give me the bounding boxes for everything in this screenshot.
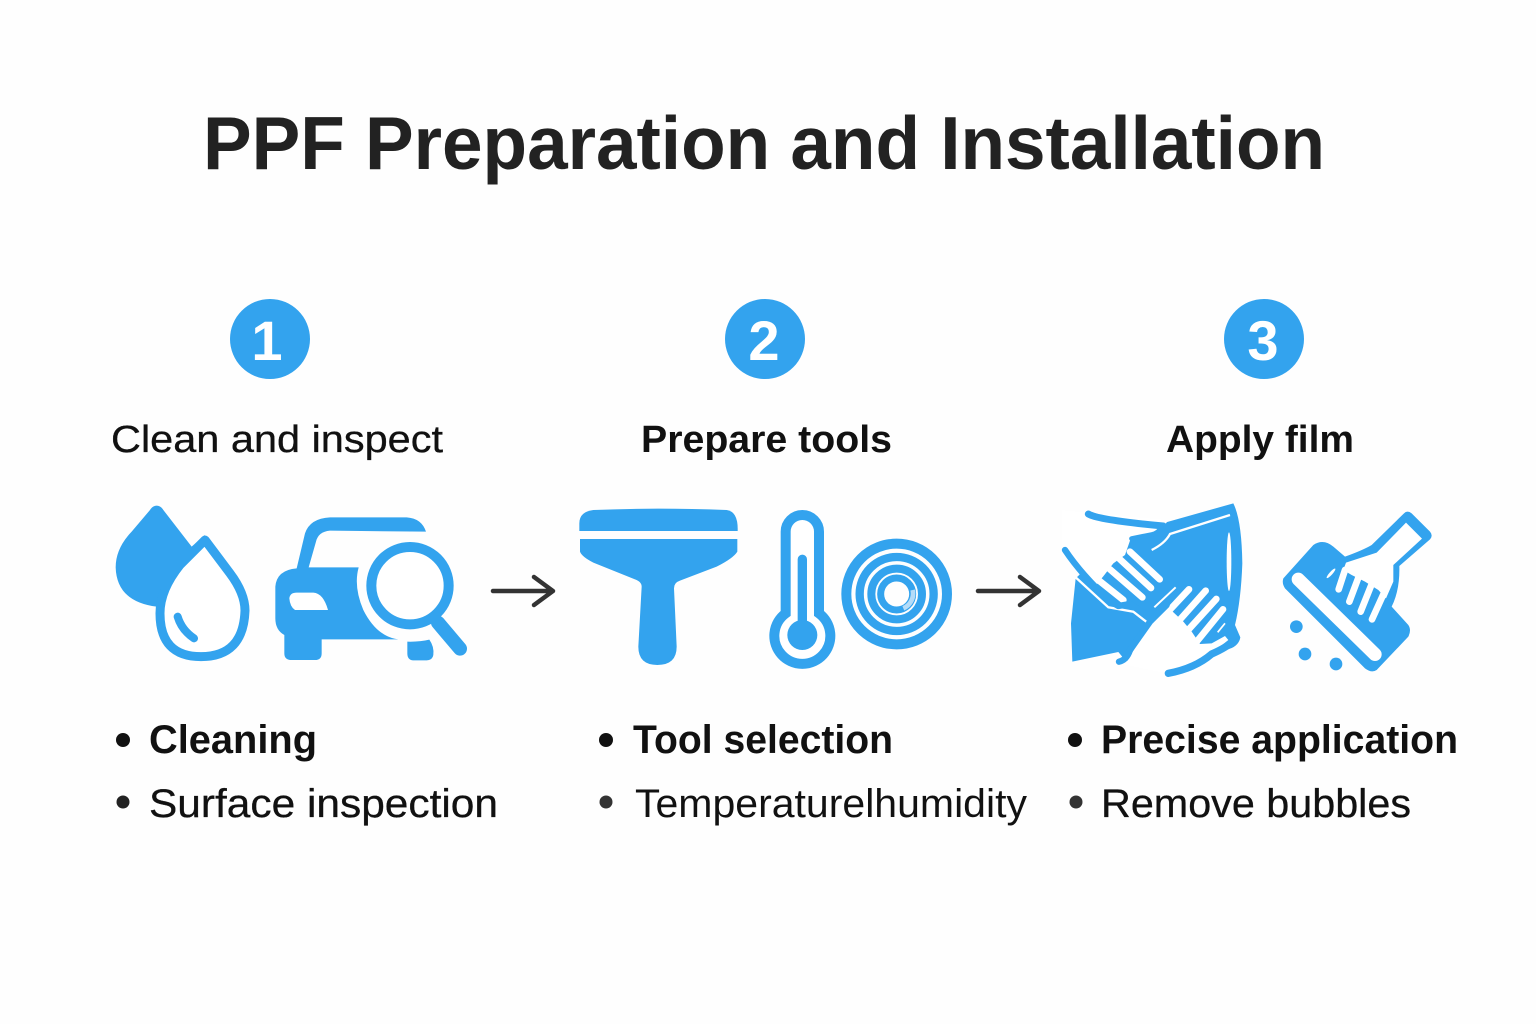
title: PPF Preparation and Installation (203, 101, 1325, 185)
list: clean and inspect: Cleaning (149, 718, 317, 762)
list: prepare tools: Tool selection (633, 718, 893, 762)
heading: clean and inspect: Clean and inspect (111, 419, 443, 461)
heading: prepare tools: Prepare tools (641, 419, 892, 461)
icon: car with magnifier (275, 517, 460, 660)
step number 1 (230, 299, 310, 379)
arrow: step 2 to step 3 (978, 577, 1039, 605)
icon: film roll (846, 544, 947, 644)
list: apply film (1068, 718, 1458, 826)
step number 3 (1224, 299, 1304, 379)
list: apply film: Remove bubbles (1101, 782, 1411, 826)
list: prepare tools: Temperaturelhumidity (635, 782, 1027, 826)
panel: step 2 prepare tools (579, 299, 1027, 826)
icon: thermometer (774, 515, 830, 664)
panel: step 1 clean and inspect (111, 299, 498, 826)
list: clean and inspect: Surface inspection (149, 782, 498, 826)
list: clean and inspect (116, 718, 498, 826)
step number 3: 3 (1247, 309, 1279, 372)
icon: hands smoothing film (1062, 503, 1242, 673)
icon: hand with scraper (1283, 512, 1432, 671)
list: apply film: Precise application (1101, 718, 1458, 762)
heading: apply film: Apply film (1166, 419, 1354, 461)
list: prepare tools (599, 718, 1027, 826)
icon: squeegee (579, 509, 738, 665)
step number 1: 1 (251, 309, 283, 372)
panel: step 3 apply film (1062, 299, 1458, 826)
arrow: step 1 to step 2 (493, 577, 553, 605)
icon: water drops (116, 506, 245, 657)
step number 2 (725, 299, 805, 379)
step number 2: 2 (748, 309, 780, 372)
